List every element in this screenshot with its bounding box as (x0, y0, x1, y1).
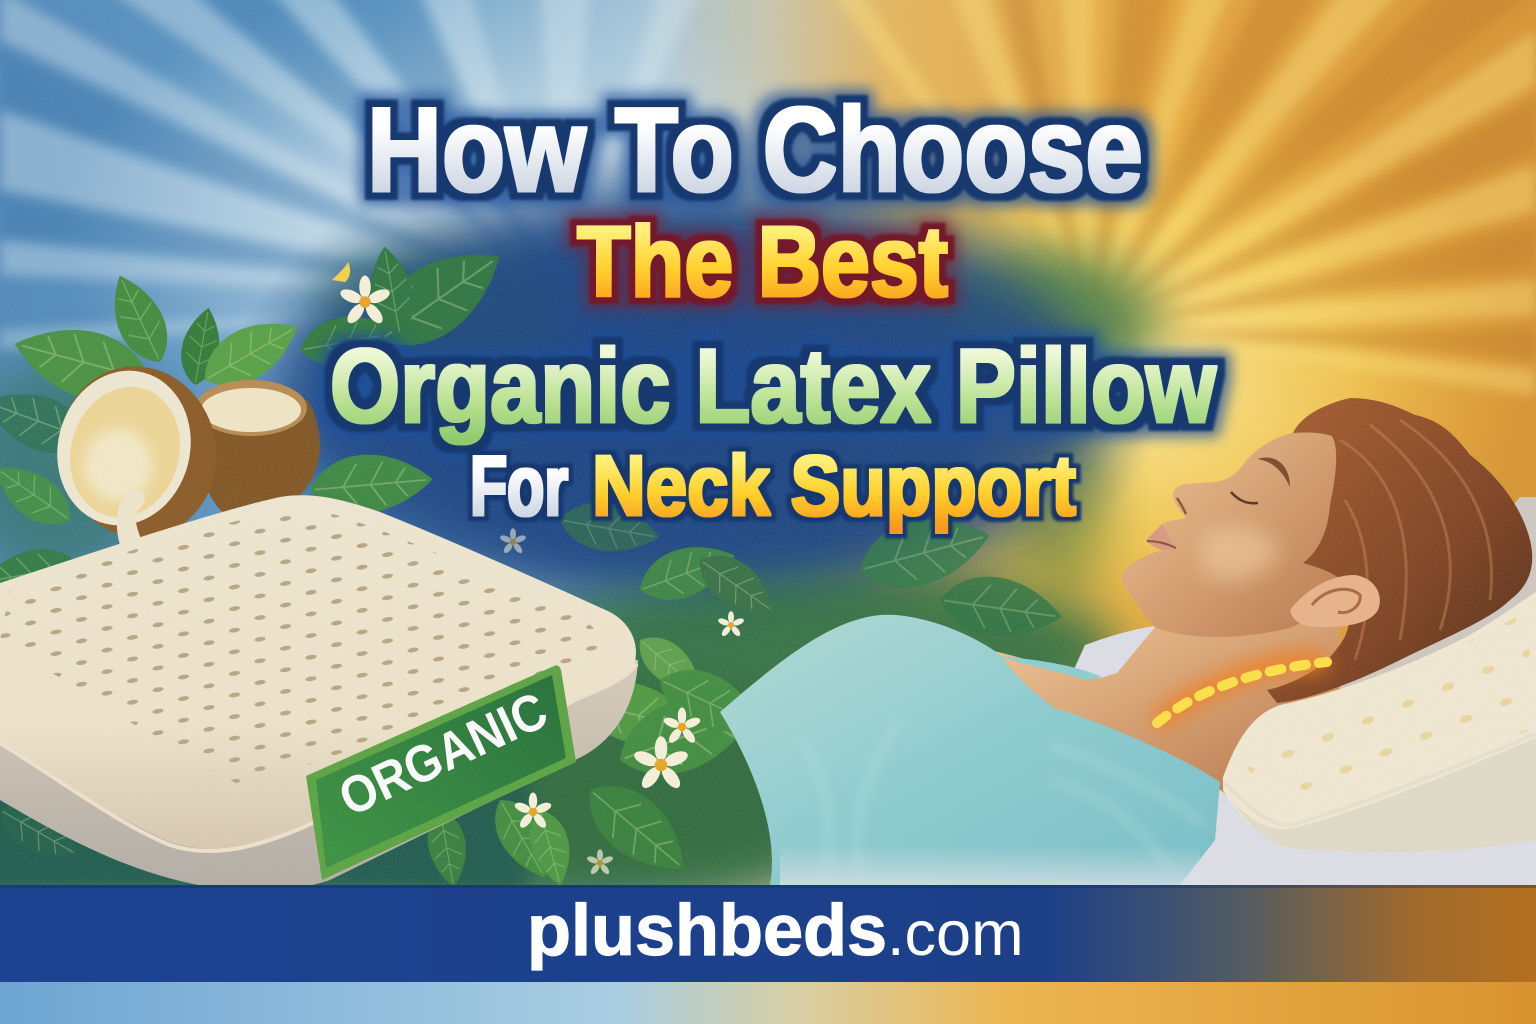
pillow side shade (1232, 738, 1536, 852)
latex pillow, left (0, 495, 638, 891)
title line 4 highlight: Neck Support (592, 439, 1076, 534)
light rays: blue side (0, 0, 700, 350)
pillow ventilation holes (0, 508, 601, 785)
icon: coconuts (41, 352, 320, 552)
drip of latex (117, 488, 145, 545)
closed eye (1231, 492, 1258, 503)
woman sleeping, right (720, 398, 1536, 885)
green foliage backdrop (0, 250, 1160, 910)
footer band (0, 885, 1536, 1024)
nostril (1177, 498, 1186, 514)
darker rays: orange side (1000, 0, 1536, 358)
lips (1146, 524, 1176, 550)
ear (1290, 575, 1380, 627)
flowers (332, 262, 745, 876)
pillow seam (1224, 734, 1536, 825)
teal shirt body (720, 615, 1220, 885)
face (1122, 415, 1350, 637)
title line 1: How To Choose (367, 83, 1143, 217)
light rays: orange side (830, 0, 1536, 395)
eyebrow (1257, 457, 1290, 487)
right pillow back edge (1300, 497, 1536, 850)
back coconut (195, 380, 320, 520)
neck support dashed line (1157, 662, 1327, 723)
mouth line (1147, 541, 1176, 548)
skin: chest and neck (990, 620, 1340, 790)
pillow side (0, 640, 638, 891)
sheet fade over shirt bottom (780, 845, 1200, 885)
white bedsheet (960, 625, 1536, 885)
title line 3: Organic Latex Pillow (330, 328, 1216, 445)
title text group (330, 83, 1216, 534)
seam (0, 664, 637, 851)
title line 4: For (470, 439, 568, 534)
organic badge (306, 665, 576, 880)
neck support glow (1157, 662, 1327, 723)
cheek highlight (1200, 525, 1280, 581)
shirt collar back (1000, 656, 1102, 680)
front coconut half (41, 352, 232, 552)
website address: plushbeds.com (527, 891, 1024, 971)
title line 2: The Best (577, 206, 948, 318)
pillow top surface (0, 495, 636, 849)
darker rays: blue side (0, 0, 560, 300)
head pillow (1223, 592, 1536, 852)
hair strands (1340, 420, 1492, 660)
shirt folds (800, 720, 1205, 880)
dark blue shade behind title (280, 210, 1100, 580)
badge text: ORGANIC (331, 681, 556, 828)
hair (1267, 398, 1532, 703)
leaves behind coconuts and pillow (0, 227, 1066, 891)
